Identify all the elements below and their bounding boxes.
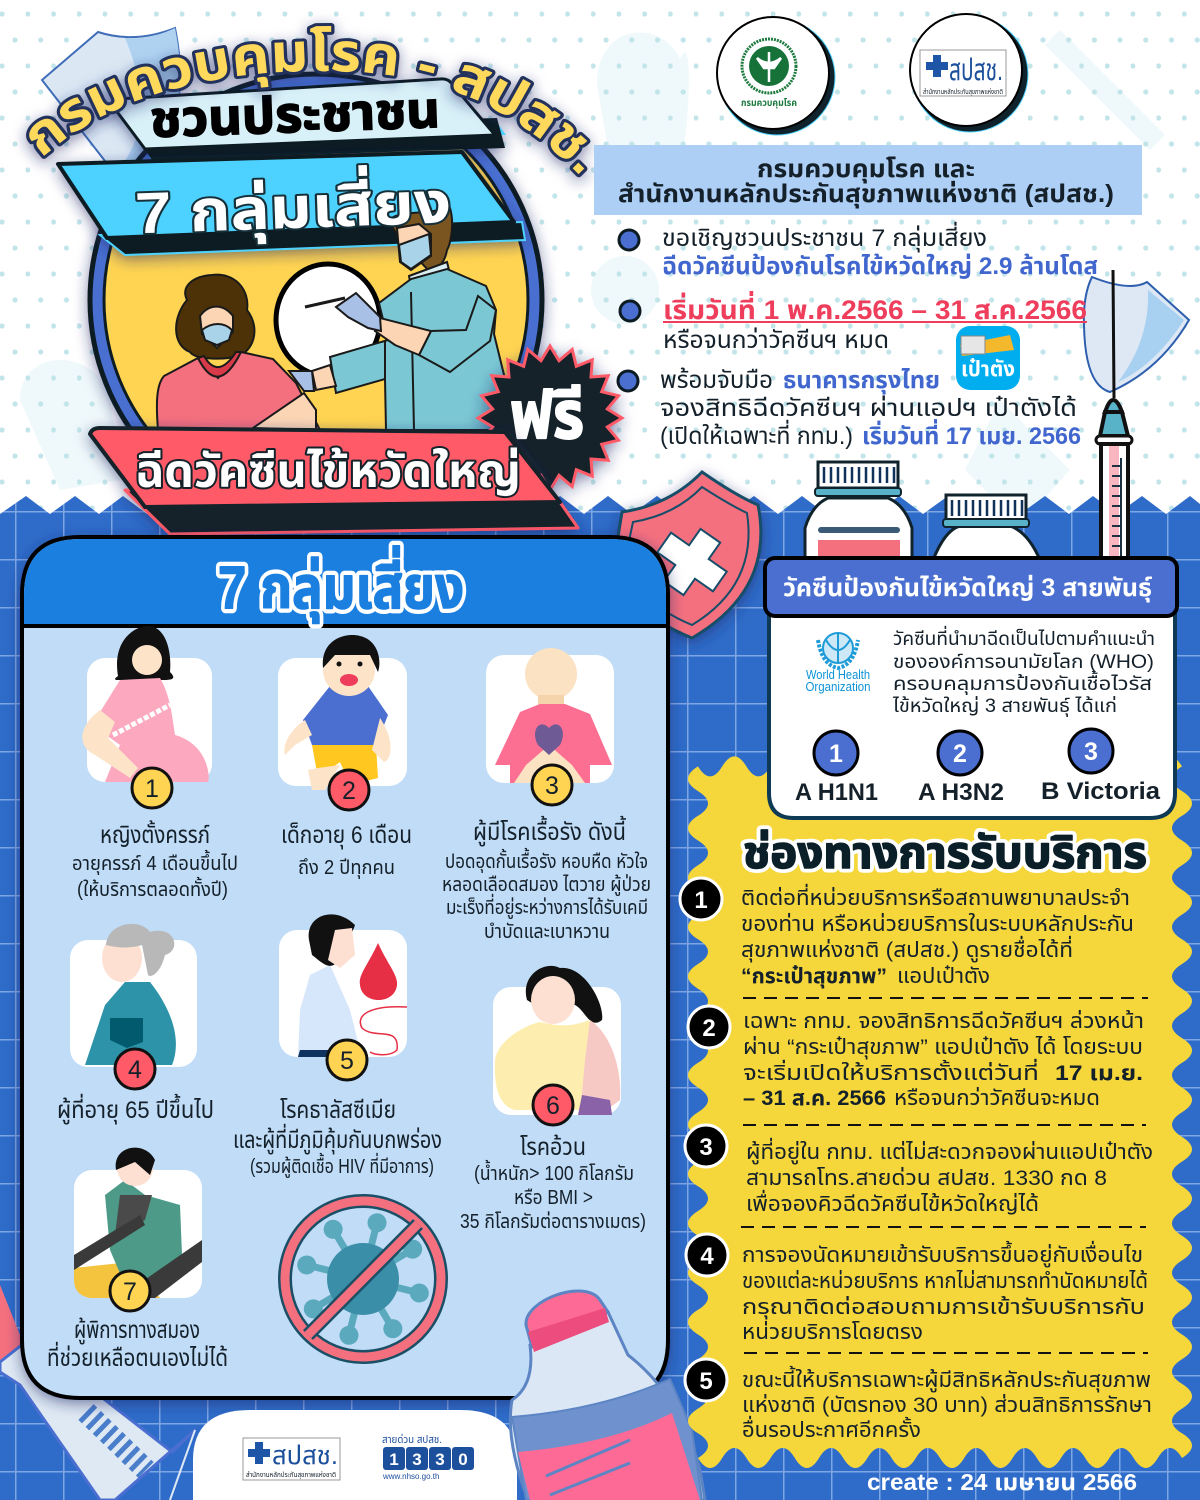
logo: สปสช.: สำนักงานหลักประกันสุขภาพแห่งชาติ — [923, 87, 1003, 97]
footer hotline 1330: 0 — [458, 1450, 468, 1469]
ribbon: ชวนประชาชน — [112, 79, 506, 160]
strain 3: 3 — [1084, 738, 1098, 766]
footer hotline 1330: 1 — [389, 1450, 399, 1469]
bullet 3: พร้อมจับมือ — [660, 367, 773, 394]
panel heading: 7 กลุ่มเสี่ยง — [218, 545, 464, 624]
item 1 — [680, 878, 1134, 989]
caption 7: ที่ช่วยเหลือตนเองไม่ได้ — [47, 1341, 228, 1372]
item 4 — [686, 1234, 1148, 1344]
group 6: obesity: 6 — [546, 1092, 560, 1120]
bullet list — [618, 221, 1098, 450]
group 3: chronic disease — [442, 648, 651, 943]
group 4: elderly: 4 — [128, 1056, 142, 1084]
ribbon text: 7 กลุ่มเสี่ยง: 7 กลุ่มเสี่ยง — [134, 161, 452, 248]
badge 6 — [533, 1085, 573, 1125]
panel: 7 กลุ่มเสี่ยง — [22, 537, 668, 1398]
group 3: chronic disease: 3 — [545, 772, 559, 800]
who explanation: ไข้หวัดใหญ่ 3 สายพันธุ์ ได้แก่ — [892, 694, 1117, 717]
bullet 1: ขอเชิญชวนประชาชน 7 กลุ่มเสี่ยง — [662, 221, 987, 253]
item 5: แห่งชาติ (บัตรทอง 30 บาท) ส่วนสิทธิการรักษา — [742, 1393, 1152, 1417]
item 2 — [688, 1006, 1144, 1110]
footer logo: สปสช.: สปสช. — [272, 1440, 338, 1470]
bullet 3: จองสิทธิฉีดวัคซีนฯ ผ่านแอปฯ เป๋าตังได้ — [660, 394, 1077, 422]
caption 7 — [47, 1317, 228, 1372]
panel: 3 สายพันธุ์ — [765, 558, 1177, 818]
icon: pink shield with cross — [615, 472, 761, 638]
strain panel header — [765, 558, 1177, 616]
group 1: pregnant — [72, 626, 238, 901]
caption 1: (ให้บริการตลอดทั้งปี) — [77, 876, 228, 901]
illustration: white circle behind doctor — [276, 264, 380, 376]
bullet 2 — [620, 291, 1087, 354]
item 2: ผ่าน “กระเป๋าสุขภาพ” แอปเป๋าตัง ได้ โดยระบบ — [743, 1035, 1143, 1060]
icon: เป๋าตัง app — [956, 326, 1020, 390]
ribbon: 7 กลุ่มเสี่ยง — [58, 152, 525, 255]
strain 2 — [918, 731, 1004, 806]
bullet 1 — [619, 221, 1098, 280]
strain 2: 2 — [953, 740, 967, 768]
caption 1: อายุครรภ์ 4 เดือนขึ้นไป — [72, 849, 238, 875]
strain 1: 1 — [829, 740, 843, 768]
who explanation: วัคซีนที่นำมาฉีดเป็นไปตามคำแนะนำ — [893, 625, 1155, 650]
caption 2 — [281, 821, 412, 879]
caption 7: ผู้พิการทางสมอง — [74, 1317, 200, 1345]
caption 1 — [72, 819, 238, 901]
ribbon: ฉีดวัคซีนไข้หวัดใหญ่ — [90, 428, 578, 534]
caption 6 — [460, 1134, 646, 1233]
item 2: 2 — [702, 1015, 716, 1042]
footer hotline 1330: www.nhso.go.th — [382, 1472, 439, 1481]
starburst: ฟรี — [478, 346, 622, 490]
caption 5 — [233, 1097, 442, 1179]
free label: ฟรี — [510, 378, 584, 452]
caption 4: ผู้ที่อายุ 65 ปีขึ้นไป — [57, 1093, 214, 1125]
create date: create : 24 เมษายน 2566 — [867, 1469, 1137, 1495]
caption 3: หลอดเลือดสมอง ไตวาย ผู้ป่วย — [442, 873, 651, 897]
panel header — [24, 539, 666, 625]
item 5 — [685, 1359, 1152, 1442]
panel footer: contacts — [193, 1410, 517, 1500]
footer logo: สปสช.: สำนักงานหลักประกันสุขภาพแห่งชาติ — [246, 1470, 336, 1480]
item 1: 1 — [694, 887, 708, 914]
item 5: ขณะนี้ให้บริการเฉพาะผู้มีสิทธิหลักประกันสุขภาพ — [742, 1365, 1151, 1393]
badge 5 — [327, 1040, 367, 1080]
icon: เป๋าตัง app: เป๋าตัง — [961, 358, 1015, 381]
faint background health icons — [20, 30, 1165, 525]
badge 7 — [110, 1271, 150, 1311]
item 4: ของแต่ละหน่วยบริการ หากไม่สามารถทำนัดหมายได้ — [742, 1269, 1148, 1293]
heading: ช่องทางการรับบริการ: ช่องทางการรับบริการ — [743, 829, 1147, 878]
bullet 3: ธนาคารกรุงไทย — [783, 367, 940, 395]
item 4: 4 — [700, 1243, 714, 1270]
caption 6: หรือ BMI > — [514, 1187, 593, 1209]
caption 2: เด็กอายุ 6 เดือน — [281, 821, 412, 850]
icon: shield behind title — [42, 28, 180, 170]
item 3: ผู้ที่อยู่ใน กทม. แต่ไม่สะดวกจองผ่านแอปเป๋าตัง — [746, 1137, 1153, 1165]
who explanation — [892, 625, 1155, 717]
caption 3: บำบัดและเบาหวาน — [484, 921, 610, 943]
caption 3: มะเร็งที่อยู่ระหว่างการได้รับเคมี — [446, 893, 648, 920]
background: blue grid with zigzag edge — [0, 496, 1200, 1500]
icon: vaccine bottle large — [805, 462, 912, 560]
item 2: – 31 ส.ค. 2566 — [743, 1087, 886, 1110]
item 4: กรุณาติดต่อสอบถามการเข้ารับบริการกับ — [742, 1295, 1145, 1320]
badge 3 — [532, 765, 572, 805]
icon: vaccine bottle small — [933, 495, 1040, 560]
logo: สปสช. — [910, 14, 1028, 132]
icon: syringe — [1096, 270, 1132, 558]
logo: WHO — [806, 632, 871, 694]
background: white dotted area — [0, 0, 1200, 525]
item 2: เฉพาะ กทม. จองสิทธิการฉีดวัคซีนฯ ล่วงหน้า — [743, 1009, 1144, 1033]
item 2: จะเริ่มเปิดให้บริการตั้งแต่วันที่ — [743, 1058, 1039, 1085]
item 3: เพื่อจองคิวฉีดวัคซีนไข้หวัดใหญ่ได้ — [746, 1189, 1039, 1216]
item 1: สุขภาพแห่งชาติ (สปสช.) ดูรายชื่อได้ที่ — [741, 935, 1073, 963]
panel heading: 7 กลุ่มเสี่ยง — [218, 545, 464, 624]
item 1: ของท่าน หรือหน่วยบริการในระบบหลักประกัน — [741, 912, 1134, 936]
caption 6: 35 กิโลกรัมต่อตารางเมตร) — [460, 1210, 646, 1233]
bullet 2: หรือจนกว่าวัคซีนฯ หมด — [663, 326, 889, 354]
footer logo: สปสช. — [243, 1438, 340, 1480]
item 5: อื่นรอประกาศอีกครั้ง — [742, 1415, 921, 1442]
footer hotline 1330: 3 — [412, 1450, 422, 1469]
badge 1 — [132, 768, 172, 808]
logo: WHO: Organization — [806, 680, 871, 694]
badge 4 — [115, 1049, 155, 1089]
illustration: medicine bottle — [510, 1291, 705, 1500]
strain 3: B Victoria — [1041, 778, 1161, 805]
ribbon text: ชวนประชาชน — [149, 82, 441, 148]
caption 5: โรคธาลัสซีเมีย — [280, 1097, 396, 1124]
caption 6: (น้ำหนัก> 100 กิโลกรัม — [474, 1159, 634, 1185]
decorative syringe bottom-left — [0, 1285, 195, 1500]
hero circle illustration — [90, 74, 542, 526]
strain 1 — [795, 731, 878, 806]
banner: หน่วยงาน: กรมควบคุมโรค และ — [757, 155, 975, 184]
footer hotline 1330: 3 — [435, 1450, 445, 1469]
caption 2: ถึง 2 ปีทุกคน — [298, 857, 395, 879]
ribbon text: ฉีดวัคซีนไข้หวัดใหญ่ — [135, 445, 521, 497]
bullet 3: เริ่มวันที่ 17 เมย. 2566 — [862, 419, 1081, 450]
group 5: thalassemia — [233, 914, 442, 1179]
logo: กรมควบคุมโรค — [717, 17, 835, 135]
banner: หน่วยงาน — [594, 145, 1142, 215]
caption 3: ผู้มีโรคเรื้อรัง ดังนี้ — [473, 815, 626, 847]
icon: no virus — [285, 1201, 441, 1357]
item 4: การจองนัดหมายเข้ารับบริการขึ้นอยู่กับเงื่อนไข — [742, 1240, 1143, 1268]
item 2: หรือจนกว่าวัคซีนจะหมด — [894, 1086, 1100, 1110]
item 5: 5 — [699, 1368, 713, 1395]
group 1: pregnant: 1 — [145, 775, 159, 803]
icon: face shield — [1084, 277, 1189, 392]
footer hotline 1330 — [382, 1433, 474, 1481]
group 7: disabled — [47, 1148, 228, 1372]
group 7: disabled: 7 — [123, 1278, 137, 1306]
bullet 1: ฉีดวัคซีนป้องกันโรคไข้หวัดใหญ่ 2.9 ล้านโดส — [662, 252, 1098, 280]
caption 3 — [442, 815, 651, 943]
item 1: “กระเป๋าสุขภาพ” — [741, 965, 887, 989]
caption 5: และผู้ที่มีภูมิคุ้มกันบกพร่อง — [233, 1123, 442, 1155]
caption 3: ปอดอุดกั้นเรื้อรัง หอบหืด หัวใจ — [445, 847, 648, 873]
item 3 — [685, 1125, 1153, 1216]
strain 3 — [1041, 729, 1161, 805]
group 6: obesity — [460, 966, 646, 1233]
who explanation: ขององค์การอนามัยโลก (WHO) — [893, 652, 1154, 673]
banner: หน่วยงาน: สำนักงานหลักประกันสุขภาพแห่งชาติ (สปสช.) — [618, 180, 1114, 209]
item 3: 3 — [699, 1134, 713, 1161]
footer hotline 1330: สายด่วน สปสช. — [382, 1433, 442, 1446]
logo: สปสช.: สปสช. — [949, 54, 1003, 87]
item 2: 17 เม.ย. — [1055, 1062, 1143, 1085]
logo: กรมควบคุมโรค: กรมควบคุมโรค — [741, 97, 797, 109]
illustration: woman patient — [157, 275, 320, 430]
item 1: ติดต่อที่หน่วยบริการหรือสถานพยาบาลประจำ — [741, 883, 1130, 910]
title arc: กรมควบคุมโรค - สปสช.: กรมควบคุมโรค - สปสช. — [17, 17, 598, 188]
item 1: แอปเป๋าตัง — [897, 965, 990, 988]
badge 2 — [329, 770, 369, 810]
caption 6: โรคอ้วน — [520, 1134, 586, 1161]
panel: วิธีรับบริการ wavy yellow — [688, 756, 1192, 1468]
group 4: elderly — [57, 924, 214, 1125]
bullet 2: เริ่มวันที่ 1 พ.ค.2566 – 31 ส.ค.2566 — [663, 291, 1087, 325]
item 3: สามารถโทร.สายด่วน สปสช. 1330 กด 8 — [746, 1166, 1107, 1190]
group 2: child: 2 — [342, 777, 356, 805]
caption 5: (รวมผู้ติดเชื้อ HIV ที่มีอาการ) — [250, 1152, 434, 1179]
strain panel header: วัคซีนป้องกันไข้หวัดใหญ่ 3 สายพันธุ์ — [783, 574, 1152, 603]
heading: ช่องทางการรับบริการ: ช่องทางการรับบริการ — [743, 829, 1147, 878]
who explanation: ครอบคลุมการป้องกันเชื้อไวรัส — [893, 670, 1152, 695]
illustration: doctor — [289, 208, 506, 430]
group 5: thalassemia: 5 — [340, 1047, 354, 1075]
bullet 3: (เปิดให้เฉพาะที่ กทม.) — [660, 419, 853, 450]
logo: WHO: World Health — [806, 668, 870, 682]
item 4: หน่วยบริการโดยตรง — [742, 1320, 923, 1344]
caption 1: หญิงตั้งครรภ์ — [100, 819, 210, 849]
group 2: child — [278, 635, 412, 879]
strain 1: A H1N1 — [795, 779, 878, 806]
strain 2: A H3N2 — [918, 779, 1004, 806]
bullet 3 — [618, 367, 1081, 450]
